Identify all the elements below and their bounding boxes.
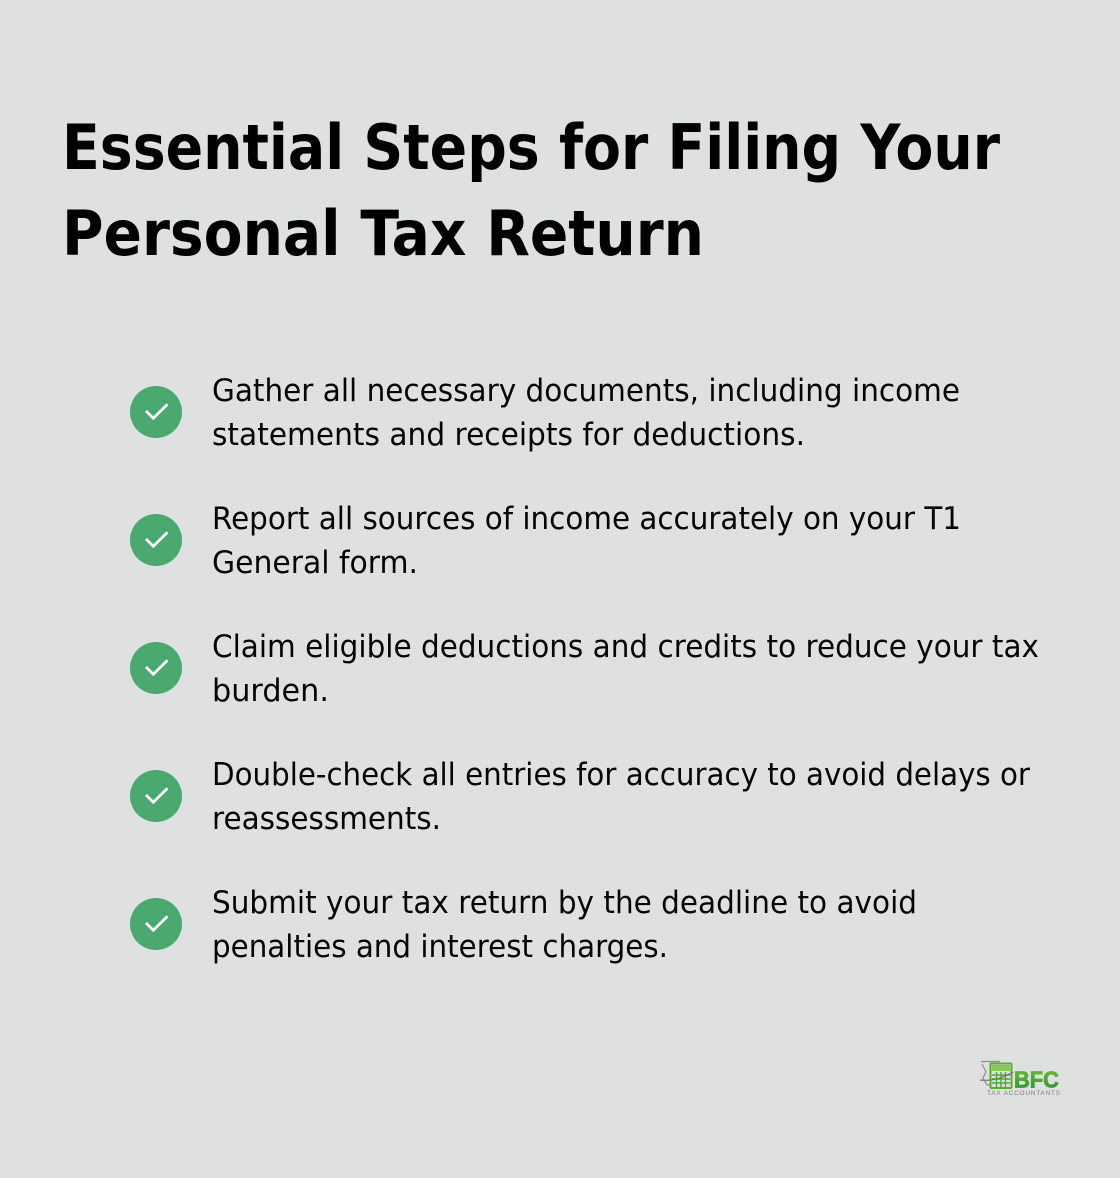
icon: calculator: [980, 1062, 1013, 1088]
step 3: [130, 629, 1039, 709]
title: Personal Tax Return: [62, 197, 704, 270]
step 2 text: Report all sources of income accurately on your T1: [212, 501, 961, 537]
checklist: [130, 373, 1039, 965]
icon: check: [130, 770, 182, 822]
icon: check: [130, 386, 182, 438]
step 5 text: Submit your tax return by the deadline to avoid: [212, 885, 917, 921]
step 1 text: Gather all necessary documents, including income: [212, 373, 960, 409]
step 4 text: reassessments.: [212, 801, 441, 837]
logo wordmark: BFC: [1014, 1066, 1059, 1092]
step 3 text: burden.: [212, 673, 329, 709]
step 3 text: Claim eligible deductions and credits to reduce your tax: [212, 629, 1039, 665]
step 5 text: penalties and interest charges.: [212, 929, 668, 965]
step 4 text: Double-check all entries for accuracy to avoid delays or: [212, 757, 1030, 793]
step 4: [130, 757, 1030, 837]
logo tagline: TAX ACCOUNTANTS: [987, 1090, 1061, 1097]
title: Essential Steps for Filing Your: [62, 111, 1000, 184]
step 5 text: [212, 885, 917, 965]
step 1 text: [212, 373, 960, 453]
step 1 text: statements and receipts for deductions.: [212, 417, 805, 453]
title: [62, 111, 1000, 270]
logo: BFC Tax Accountants: [980, 1062, 1061, 1097]
step 2: [130, 501, 961, 581]
step 1: [130, 373, 960, 453]
icon: check: [130, 514, 182, 566]
icon: check: [130, 642, 182, 694]
step 2 text: General form.: [212, 545, 418, 581]
icon: check: [130, 898, 182, 950]
step 4 text: [212, 757, 1030, 837]
step 2 text: [212, 501, 961, 581]
step 5: [130, 885, 917, 965]
step 3 text: [212, 629, 1039, 709]
